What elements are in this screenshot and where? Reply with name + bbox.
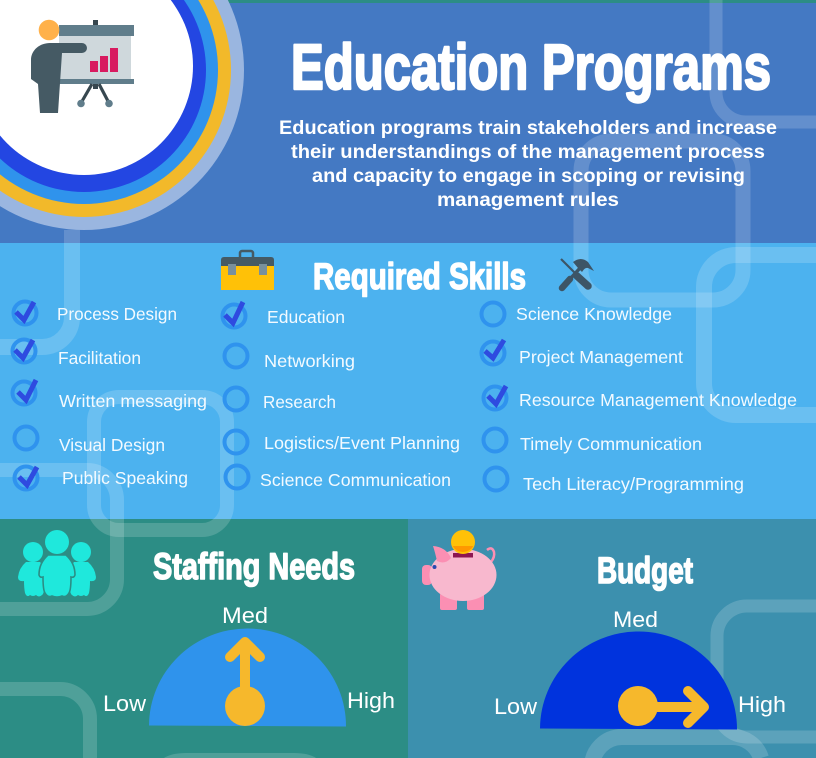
skill: process design xyxy=(14,302,177,324)
icon: piggy bank with coin xyxy=(422,530,496,610)
skill: research xyxy=(224,388,336,412)
gauge: staffing needs at medium: Med xyxy=(222,603,268,628)
panel: staffing needs background xyxy=(0,519,408,758)
heading: staffing needs: Staffing Needs xyxy=(153,546,355,587)
intro paragraph xyxy=(279,118,777,211)
icon: group of people xyxy=(18,530,96,597)
skills column 3 xyxy=(482,302,797,494)
skill: logistics and event planning: Logistics/Event Planning xyxy=(264,433,460,453)
skill: science communication: Science Communication xyxy=(260,470,451,490)
intro paragraph: their understandings of the management process xyxy=(291,142,765,163)
heading: required skills: Required Skills xyxy=(313,256,526,297)
intro paragraph: and capacity to engage in scoping or revising xyxy=(312,166,745,187)
gauge: budget at high xyxy=(494,607,786,730)
skill: public speaking xyxy=(14,466,188,490)
gauge: budget at high: Low xyxy=(494,694,537,719)
gauge: budget at high: High xyxy=(738,692,786,717)
icon: presenter with chart board xyxy=(31,20,134,113)
skill: visual design: Visual Design xyxy=(59,435,165,455)
skill: process design: Process Design xyxy=(57,304,177,324)
skill: project management: Project Management xyxy=(519,347,683,367)
skill: facilitation xyxy=(12,340,141,368)
heading: budget: Budget xyxy=(597,550,693,591)
gauge: staffing needs at medium: High xyxy=(347,688,395,713)
skill: tech literacy and programming xyxy=(484,468,744,494)
skill: visual design xyxy=(14,426,165,455)
intro paragraph: management rules xyxy=(437,190,619,211)
skill: networking: Networking xyxy=(264,351,355,371)
skills column 2 xyxy=(222,302,460,490)
panel: required skills background xyxy=(0,243,816,519)
skill: tech literacy and programming: Tech Literacy/Programming xyxy=(523,474,744,494)
skill: networking xyxy=(224,344,355,371)
skill: science communication xyxy=(226,466,451,490)
skill: education xyxy=(222,302,345,328)
concentric circle badge xyxy=(0,0,244,230)
icon: hammer and screwdriver xyxy=(561,259,594,288)
gauge: staffing needs at medium xyxy=(103,603,395,726)
skill: written messaging xyxy=(12,380,207,411)
gauge: budget at high: Med xyxy=(613,607,658,632)
icon: toolbox xyxy=(221,251,274,290)
skill: education: Education xyxy=(267,307,345,327)
skill: written messaging: Written messaging xyxy=(59,391,207,411)
skills column 1 xyxy=(12,302,207,490)
panel: header background xyxy=(0,3,816,243)
skill: facilitation: Facilitation xyxy=(58,348,141,368)
panel: budget background xyxy=(408,519,816,758)
skill: project management xyxy=(482,340,683,367)
skill: science knowledge: Science Knowledge xyxy=(516,304,672,324)
skill: research: Research xyxy=(263,392,336,412)
skill: timely communication xyxy=(484,428,702,454)
gauge: staffing needs at medium: Low xyxy=(103,691,146,716)
skill: timely communication: Timely Communication xyxy=(520,434,702,454)
intro paragraph: Education programs train stakeholders and increase xyxy=(279,118,777,139)
skill: resource management knowledge: Resource Management Knowledge xyxy=(519,390,797,410)
skill: public speaking: Public Speaking xyxy=(62,468,188,488)
